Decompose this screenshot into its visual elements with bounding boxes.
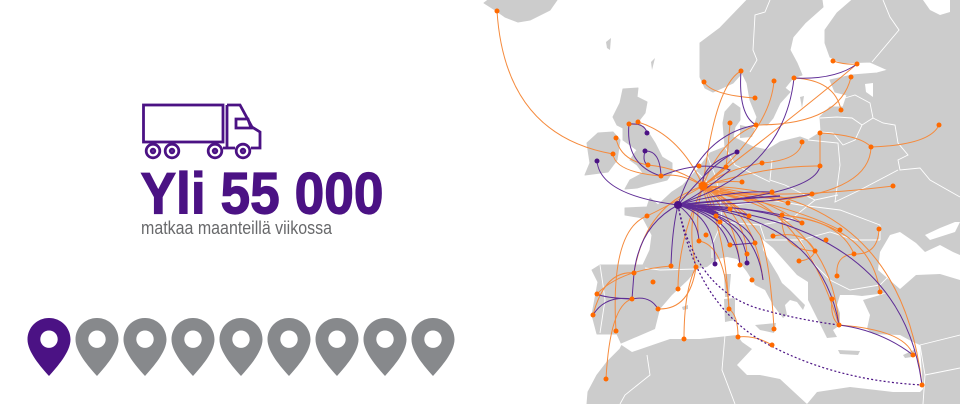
islands [606,38,916,358]
purple routes [593,64,922,385]
icon: pin 2 [76,318,118,376]
icon: pin 5 [220,318,262,376]
orange hub [698,182,708,190]
route network [494,8,942,388]
land masses [484,0,960,404]
seas [620,0,960,404]
orange routes [497,11,939,385]
country borders [600,0,960,404]
icon: pin 3 [124,318,166,376]
map of Europe [484,0,960,404]
subheading: matkaa maanteillä viikossa [141,218,333,238]
orange destinations [494,8,942,388]
icon: active pin [28,318,70,376]
headline figure: Yli 55 000 [140,162,384,226]
dotted routes [678,205,922,385]
purple destinations [594,130,750,266]
icon: pin 7 [316,318,358,376]
icon: truck [144,105,260,158]
pin row [28,318,454,376]
icon: pin 9 [412,318,454,376]
icon: pin 6 [268,318,310,376]
icon: pin 8 [364,318,406,376]
purple hub [674,201,682,209]
icon: pin 4 [172,318,214,376]
